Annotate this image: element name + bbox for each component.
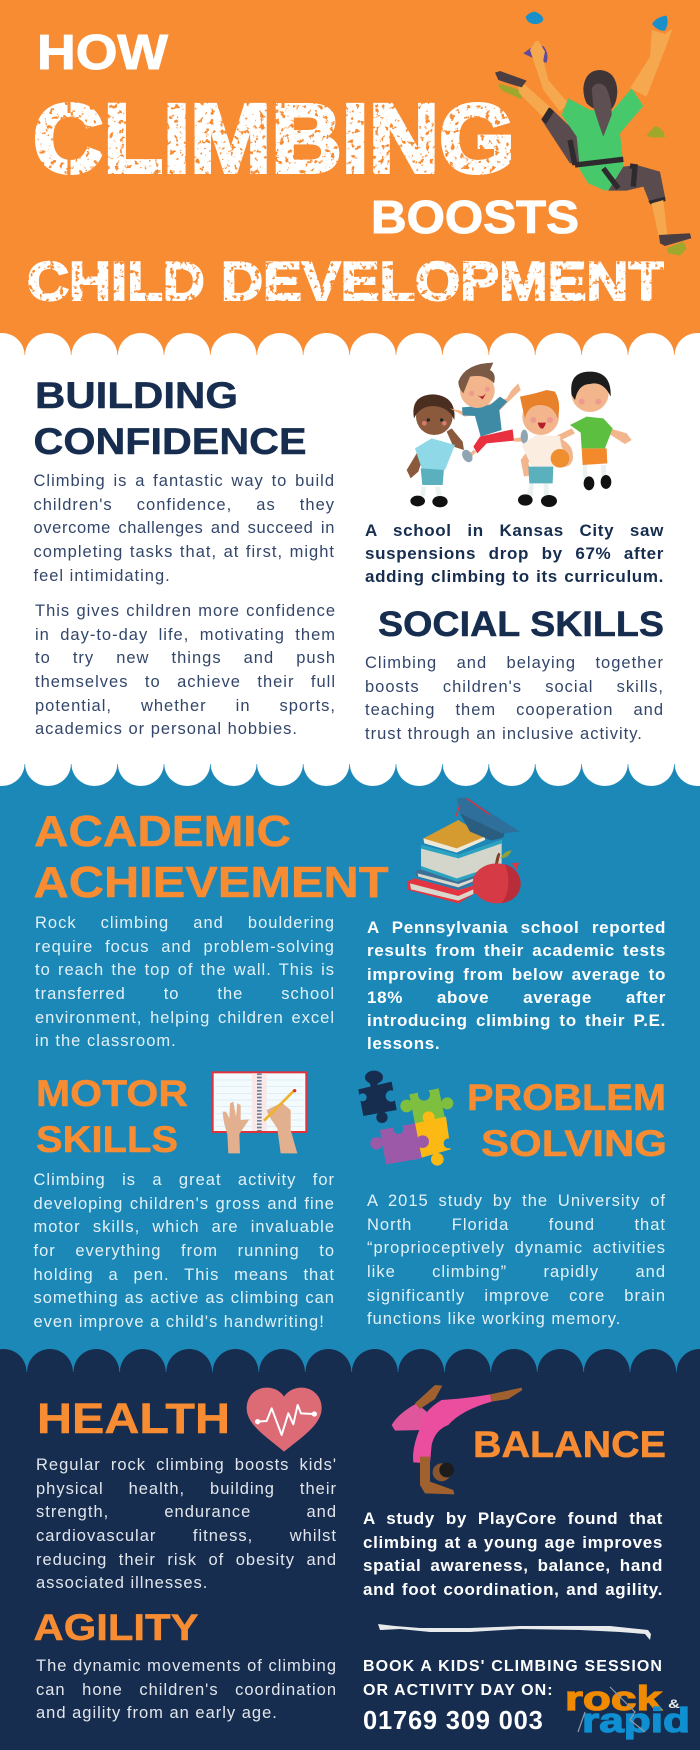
text block: academic achievement: in the classroom. bbox=[35, 1032, 177, 1050]
text block: social skills bbox=[365, 654, 664, 743]
text block: building confidence paragraph 1 bbox=[34, 472, 335, 585]
text block: social skills: boosts children's social skills, bbox=[365, 678, 664, 696]
text block: building confidence paragraph 1: Climbing is a fantastic way to build bbox=[34, 472, 335, 490]
text block: building confidence paragraph 2: to try new things and push bbox=[35, 649, 336, 667]
title: HOW: HOW bbox=[37, 26, 169, 80]
text block: motor skills: something as active as climbing can bbox=[34, 1289, 335, 1307]
logo: rock and rapid: rapid bbox=[582, 1702, 690, 1740]
heading: Building Confidence bbox=[34, 375, 306, 462]
callout: PlayCore study: spatial awareness, balance, hand bbox=[363, 1556, 663, 1575]
panel: blue section background bbox=[0, 742, 700, 1374]
heading: Agility: AGILITY bbox=[34, 1607, 199, 1648]
callout: Pennsylvania school: improving from below average to bbox=[367, 965, 666, 984]
call to action: booking text: BOOK A KIDS' CLIMBING SESSION bbox=[363, 1658, 663, 1675]
text block: social skills: trust through an inclusive activity. bbox=[365, 725, 643, 743]
text block: problem solving: North Florida found that bbox=[367, 1216, 666, 1234]
text block: academic achievement: to reach the top of the wall. This is bbox=[35, 961, 335, 979]
text block: health: strength, endurance and bbox=[36, 1503, 337, 1521]
text block: agility: can hone children's coordination bbox=[36, 1681, 337, 1699]
text block: motor skills: holding a pen. This means that bbox=[34, 1266, 335, 1284]
icon: gymnast balancing on forearms bbox=[392, 1385, 522, 1494]
callout: Pennsylvania school: results from their academic tests bbox=[367, 941, 666, 960]
divider: chalk stroke bbox=[378, 1624, 651, 1640]
heading: Social Skills: SOCIAL SKILLS bbox=[378, 605, 664, 644]
text block: problem solving: functions like working memory. bbox=[367, 1310, 621, 1328]
logo: rock and rapid: & bbox=[668, 1697, 680, 1711]
text block: motor skills: motor skills, which are invaluable bbox=[34, 1218, 335, 1236]
text block: motor skills: developing children's gross and fine bbox=[34, 1195, 335, 1213]
text block: agility bbox=[36, 1657, 337, 1722]
icon: jigsaw puzzle pieces bbox=[358, 1071, 454, 1166]
callout: PlayCore study: and foot coordination, and agility. bbox=[363, 1580, 663, 1598]
panel: white section background bbox=[0, 333, 700, 765]
text block: health: physical health, building their bbox=[36, 1480, 337, 1498]
title: CHILD DEVELOPMENT: CHILD DEVELOPMENT bbox=[27, 250, 664, 312]
callout: Pennsylvania school bbox=[367, 918, 666, 1053]
heading: Building Confidence: BUILDING bbox=[35, 375, 238, 416]
callout: Kansas City school: A school in Kansas City saw bbox=[365, 521, 664, 540]
text block: health: reducing their risk of obesity and bbox=[36, 1551, 337, 1569]
icon: group of children bbox=[407, 363, 632, 507]
heading: Academic Achievement: ACADEMIC bbox=[34, 807, 291, 856]
heading: Building Confidence: CONFIDENCE bbox=[34, 421, 306, 462]
heading: Problem Solving bbox=[467, 1077, 667, 1164]
callout: Kansas City school: suspensions drop by 67% after bbox=[365, 544, 664, 563]
heading: Academic Achievement bbox=[34, 807, 389, 907]
panel: orange header background bbox=[0, 0, 700, 356]
text block: motor skills: for everything from running to bbox=[34, 1242, 335, 1260]
text block: agility: The dynamic movements of climbing bbox=[36, 1657, 337, 1675]
text block: academic achievement: Rock climbing and bouldering bbox=[35, 914, 335, 932]
callout: Pennsylvania school: A Pennsylvania school reported bbox=[367, 918, 666, 937]
panel: navy section background bbox=[0, 1349, 700, 1750]
heading: Motor Skills: MOTOR bbox=[36, 1073, 188, 1114]
text block: problem solving bbox=[367, 1192, 666, 1328]
title: BOOSTS: BOOSTS bbox=[371, 191, 579, 243]
text block: building confidence paragraph 2: This gives children more confidence bbox=[35, 602, 336, 620]
text block: motor skills: even improve a child's handwriting! bbox=[34, 1313, 325, 1331]
callout: PlayCore study: climbing at a young age improves bbox=[363, 1532, 663, 1552]
text block: building confidence paragraph 2: potential, whether in sports, bbox=[35, 697, 336, 715]
text block: building confidence paragraph 2 bbox=[35, 602, 336, 738]
icon: heart with pulse line bbox=[247, 1388, 322, 1452]
icon: notebook and hands bbox=[213, 1072, 306, 1153]
text block: building confidence paragraph 1: overcome challenges and succeed in bbox=[34, 519, 335, 537]
title: CLIMBING: CLIMBING bbox=[33, 84, 515, 193]
text block: building confidence paragraph 1: feel intimidating. bbox=[34, 567, 171, 585]
text block: health: cardiovascular fitness, whilst bbox=[36, 1527, 337, 1545]
logo: rock and rapid: rock bbox=[565, 1680, 662, 1718]
heading: Academic Achievement: ACHIEVEMENT bbox=[34, 858, 389, 907]
heading: Problem Solving: PROBLEM bbox=[467, 1077, 666, 1118]
call to action: phone number: 01769 309 003 bbox=[363, 1707, 544, 1735]
call to action: booking text: OR ACTIVITY DAY ON: bbox=[363, 1682, 554, 1699]
callout: Pennsylvania school: introducing climbing to their P.E. bbox=[367, 1011, 666, 1030]
text block: health bbox=[36, 1456, 337, 1592]
callout: Kansas City school: adding climbing to its curriculum. bbox=[365, 567, 664, 586]
heading: Balance: BALANCE bbox=[473, 1424, 666, 1465]
text block: agility: and agility from an early age. bbox=[36, 1704, 278, 1722]
text block: social skills: Climbing and belaying together bbox=[365, 654, 664, 672]
icon: books, apple and graduation cap bbox=[407, 797, 521, 903]
text block: building confidence paragraph 1: children's confidence, as they bbox=[34, 496, 335, 514]
text block: motor skills bbox=[34, 1171, 335, 1331]
text block: problem solving: significantly improve core brain bbox=[367, 1287, 666, 1305]
text block: problem solving: “proprioceptively dynamic activities bbox=[367, 1239, 666, 1257]
text block: building confidence paragraph 2: academics or personal hobbies. bbox=[35, 720, 298, 738]
text block: problem solving: like climbing” rapidly and bbox=[367, 1263, 666, 1281]
icon: climber bbox=[495, 12, 691, 256]
callout: Kansas City school bbox=[365, 521, 664, 586]
text block: health: associated illnesses. bbox=[36, 1574, 208, 1592]
text block: building confidence paragraph 1: completing tasks that, at first, might bbox=[34, 543, 335, 561]
text block: academic achievement: transferred to the school bbox=[35, 985, 335, 1003]
callout: Pennsylvania school: lessons. bbox=[367, 1034, 440, 1053]
text block: academic achievement bbox=[35, 914, 335, 1050]
logo: rock and rapid bbox=[565, 1680, 690, 1740]
text block: building confidence paragraph 2: in day-to-day life, motivating them bbox=[35, 626, 336, 644]
text block: motor skills: Climbing is a great activity for bbox=[34, 1171, 335, 1189]
heading: Problem Solving: SOLVING bbox=[481, 1123, 667, 1164]
callout: Pennsylvania school: 18% above average after bbox=[367, 988, 666, 1007]
heading: Motor Skills: SKILLS bbox=[36, 1119, 178, 1160]
text block: academic achievement: environment, helping children excel bbox=[35, 1009, 335, 1027]
text block: academic achievement: require focus and problem-solving bbox=[35, 938, 335, 956]
heading: Motor Skills bbox=[36, 1073, 188, 1160]
heading: Health: HEALTH bbox=[37, 1395, 230, 1443]
callout: PlayCore study: A study by PlayCore found that bbox=[363, 1509, 663, 1528]
text block: building confidence paragraph 2: themselves to achieve their full bbox=[35, 673, 336, 691]
text block: problem solving: A 2015 study by the University of bbox=[367, 1192, 666, 1210]
text block: health: Regular rock climbing boosts kids' bbox=[36, 1456, 337, 1474]
text block: social skills: teaching them cooperation and bbox=[365, 701, 664, 719]
call to action: booking text bbox=[363, 1658, 663, 1699]
callout: PlayCore study bbox=[363, 1509, 663, 1598]
